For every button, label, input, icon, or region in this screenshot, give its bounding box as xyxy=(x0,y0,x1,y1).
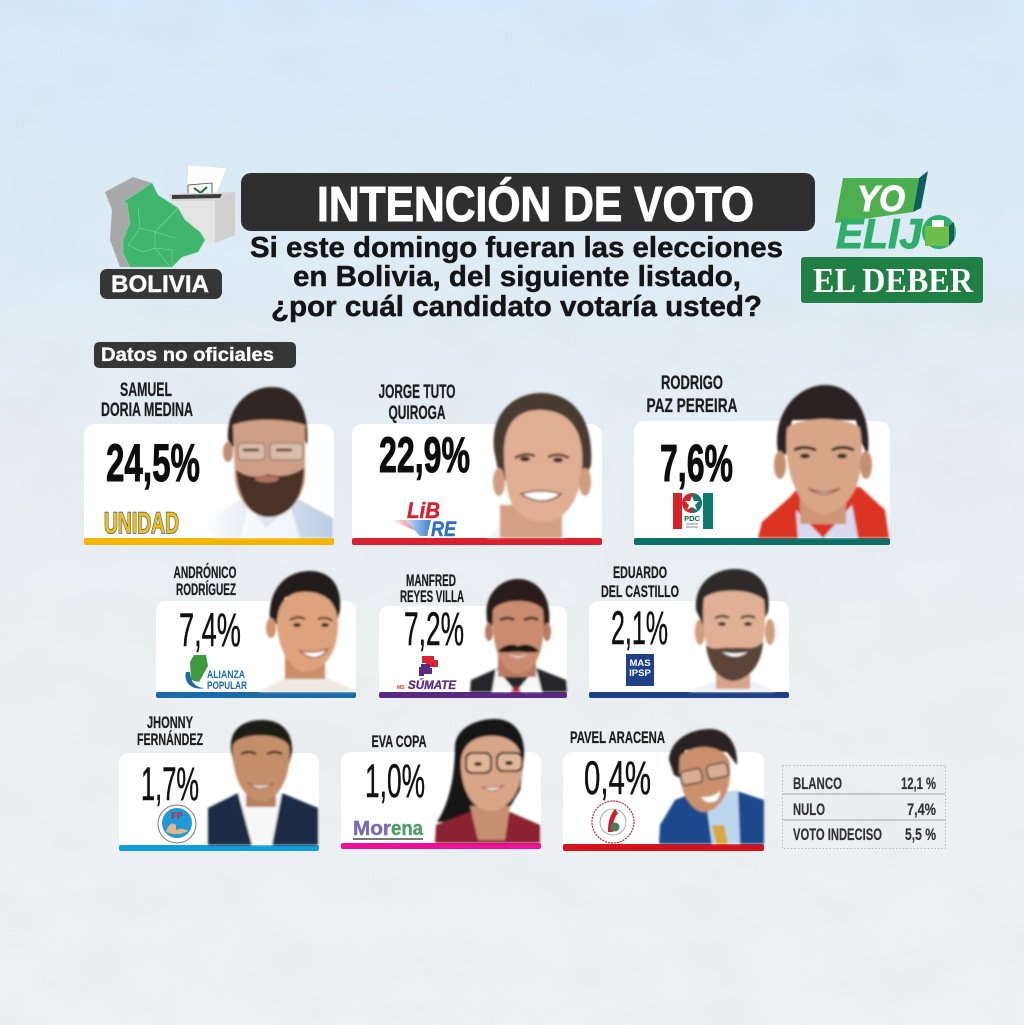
logo: El Deber: EL DEBER xyxy=(813,261,974,300)
candidate: Jhonny Fernández: 1,7% xyxy=(141,757,199,810)
row: nulo xyxy=(793,800,936,819)
party logo: Libre: RE xyxy=(431,518,457,541)
row: blanco: BLANCO xyxy=(793,774,842,793)
candidate: Rodrigo Paz Pereira xyxy=(634,373,890,545)
candidate: Eduardo del Castillo xyxy=(589,564,789,698)
row: voto indeciso: 5,5 % xyxy=(905,825,936,844)
candidate: Jhonny Fernández xyxy=(119,714,319,851)
portrait xyxy=(258,571,355,692)
party logo: MAS IPSP: MAS xyxy=(629,658,651,669)
party logo: PDC: PDC xyxy=(684,514,700,523)
row: voto indeciso: VOTO INDECISO xyxy=(793,825,882,844)
note: datos no oficiales xyxy=(94,342,296,368)
party logo: Unidad: UNIDAD xyxy=(104,507,179,540)
candidate: Manfred Reyes Villa: 7,2% xyxy=(404,602,464,655)
candidate: Eduardo del Castillo: DEL CASTILLO xyxy=(601,583,679,601)
survey question: Si este domingo fueran las elecciones xyxy=(250,232,783,264)
row: nulo: 7,4% xyxy=(907,800,936,819)
candidate: Jorge Tuto Quiroga xyxy=(352,382,602,545)
label: BOLIVIA: BOLIVIA xyxy=(111,271,209,298)
party logo: Fuerza del Pueblo xyxy=(158,805,196,843)
row: nulo: NULO xyxy=(793,800,825,819)
candidate: Pavel Aracena: 0,4% xyxy=(584,751,651,804)
candidate: Rodrigo Paz Pereira: PAZ PEREIRA xyxy=(646,396,738,417)
candidate: Rodrigo Paz Pereira: 7,6% xyxy=(660,435,733,493)
candidate: Jhonny Fernández: JHONNY xyxy=(147,714,193,732)
row: blanco xyxy=(793,774,936,793)
portrait xyxy=(758,385,889,538)
party logo: Súmate xyxy=(397,656,457,692)
candidate: Jhonny Fernández: FERNÁNDEZ xyxy=(137,730,203,749)
candidate: Samuel Doria Medina xyxy=(84,380,334,545)
logo: Yo Elijo: YO xyxy=(857,178,905,219)
candidate: Manfred Reyes Villa xyxy=(379,572,567,698)
survey question: en Bolivia, del siguiente listado, xyxy=(293,261,741,293)
candidate: Jorge Tuto Quiroga: QUIROGA xyxy=(388,403,446,424)
party logo: Morena: ena xyxy=(391,818,424,840)
icon: Bolivia map with ballot box xyxy=(100,165,235,299)
candidate: Pavel Aracena xyxy=(563,729,764,851)
row: blanco: 12,1 % xyxy=(901,774,936,793)
candidate: Eva Copa: EVA COPA xyxy=(372,733,427,751)
portrait xyxy=(470,579,567,692)
party logo: Morena: Mor xyxy=(353,818,391,840)
party logo: MAS IPSP xyxy=(626,654,654,686)
party logo: Súmate: MS xyxy=(397,685,405,691)
candidate: Manfred Reyes Villa: REYES VILLA xyxy=(400,588,464,606)
table: other responses xyxy=(782,766,946,848)
candidate: Jorge Tuto Quiroga: JORGE TUTO xyxy=(378,382,456,403)
portrait xyxy=(659,729,764,844)
party logo: Libertad y Progreso xyxy=(592,801,634,843)
candidate: Samuel Doria Medina: 24,5% xyxy=(106,434,200,493)
candidate: Andrónico Rodríguez xyxy=(156,563,356,698)
candidate: Eduardo del Castillo: EDUARDO xyxy=(613,564,667,582)
survey question xyxy=(250,232,783,323)
portrait xyxy=(203,387,333,538)
logo: Yo Elijo: ELIJ xyxy=(836,210,924,257)
candidate: Rodrigo Paz Pereira: RODRIGO xyxy=(661,373,723,394)
candidate: Andrónico Rodríguez: ANDRÓNICO xyxy=(174,563,237,582)
candidate: Andrónico Rodríguez: RODRÍGUEZ xyxy=(176,580,236,599)
party logo: Alianza Popular: ALIANZA xyxy=(207,669,245,681)
candidate: Eva Copa: 1,0% xyxy=(365,754,425,807)
party logo: Morena xyxy=(353,818,424,840)
ballot box xyxy=(168,165,235,243)
survey question: ¿por cuál candidato votaría usted? xyxy=(271,291,762,323)
party logo: Fuerza del Pueblo: FP xyxy=(171,811,183,821)
map of Bolivia xyxy=(123,183,205,267)
portrait xyxy=(435,719,540,843)
map relief xyxy=(105,177,152,267)
candidate: Samuel Doria Medina: DORIA MEDINA xyxy=(101,400,193,421)
candidate: Jorge Tuto Quiroga: 22,9% xyxy=(379,427,470,483)
portrait xyxy=(487,393,591,538)
party logo: PDC xyxy=(673,493,713,529)
note: datos no oficiales: Datos no oficiales xyxy=(101,345,274,366)
candidate: Pavel Aracena: PAVEL ARACENA xyxy=(570,729,665,747)
title bar: INTENCIÓN DE VOTO xyxy=(317,177,754,232)
party logo: Alianza Popular xyxy=(185,655,247,692)
party logo: Libre: LiB xyxy=(407,498,440,523)
logo: Yo Elijo xyxy=(835,171,956,257)
candidate: Manfred Reyes Villa: MANFRED xyxy=(406,572,456,590)
candidate: Eduardo del Castillo: 2,1% xyxy=(611,601,668,654)
party logo: Súmate: SÚMATE xyxy=(408,677,457,692)
party logo: Libre xyxy=(391,498,457,541)
candidate: Andrónico Rodríguez: 7,4% xyxy=(179,603,241,656)
party logo: MAS IPSP: IPSP xyxy=(629,668,651,679)
portrait xyxy=(688,569,776,692)
candidate: Eva Copa xyxy=(341,719,541,849)
party logo: Alianza Popular: POPULAR xyxy=(207,680,247,692)
portrait xyxy=(208,720,318,845)
candidate: Samuel Doria Medina: SAMUEL xyxy=(120,380,172,401)
